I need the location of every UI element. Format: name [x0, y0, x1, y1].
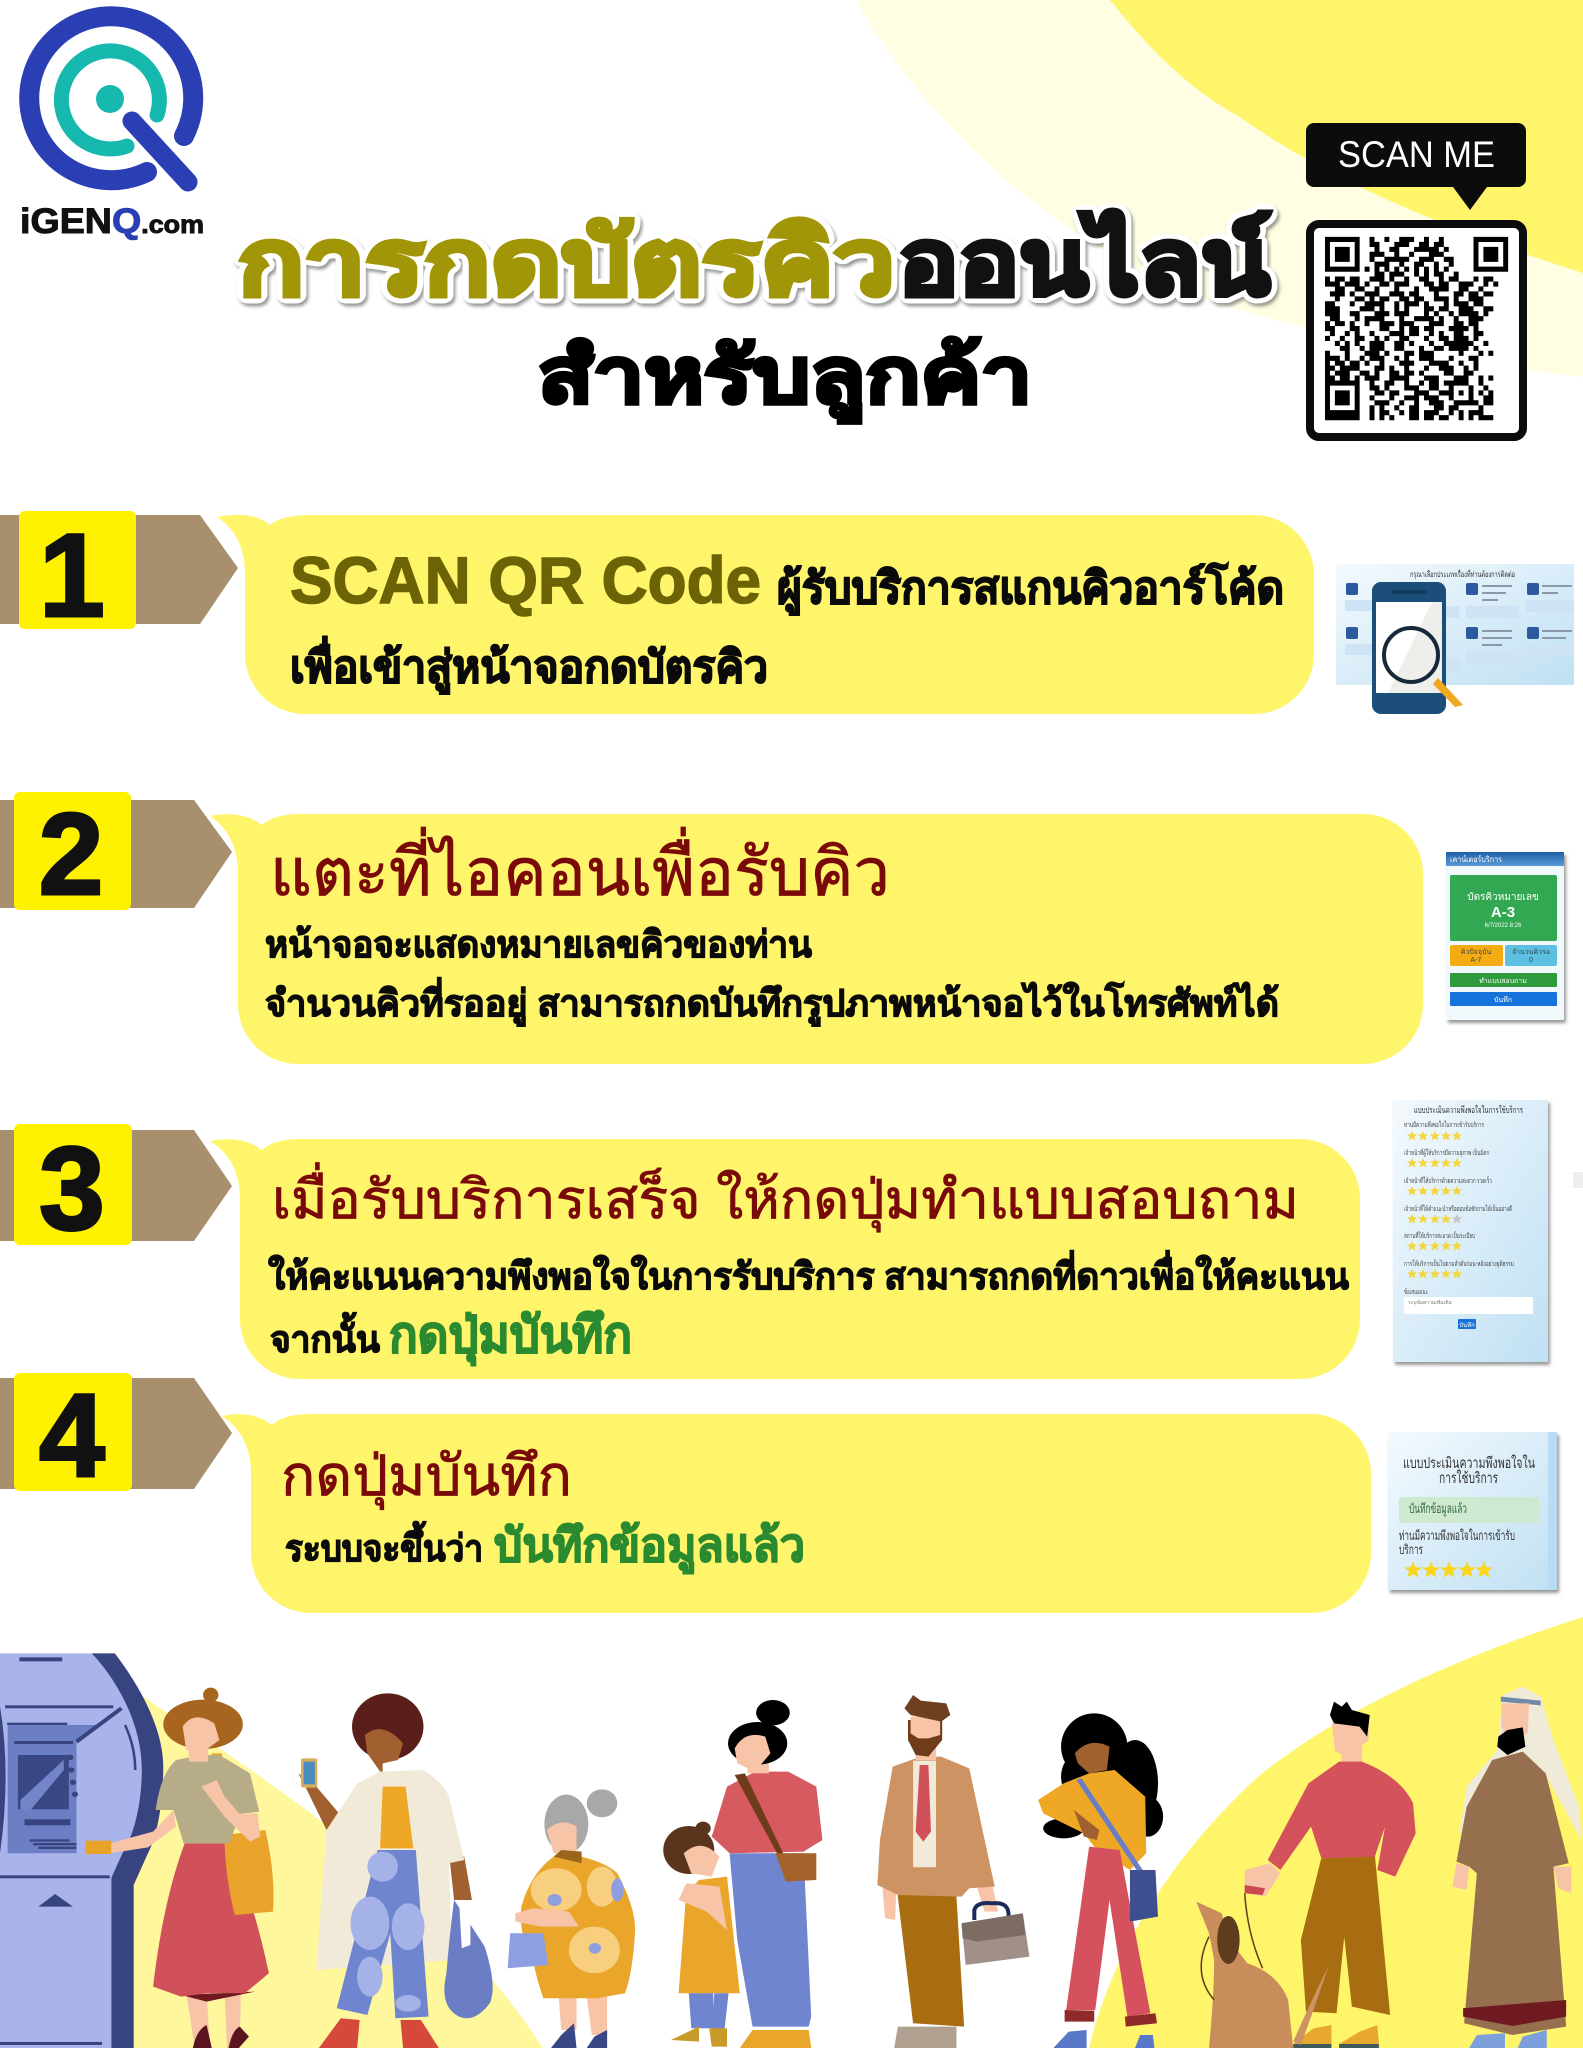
person: man in red sweater walking dog [1245, 1702, 1416, 2048]
step 1 screenshot [1336, 564, 1574, 714]
step 2 screenshot: 6/7/2022 8:26 [1485, 923, 1522, 929]
title line 1 [238, 210, 1270, 314]
person: woman with red skirt at ATM [86, 1688, 273, 2048]
step 2 bubble [210, 814, 1423, 1064]
step 1 number badge: 1 [39, 510, 105, 642]
step 4 screenshot: ท่านมีความพึงพอใจในการเข้ารับ [1399, 1528, 1515, 1543]
title line 1: การกดบัตรคิว [238, 212, 895, 314]
step 2 number badge: 2 [39, 789, 103, 919]
step 4 [0, 1370, 1557, 1613]
step 3 ribbon [0, 1130, 232, 1241]
title line 1: ออนไลน์ [898, 210, 1270, 314]
title line 2: สำหรับลูกค้า [538, 334, 1032, 423]
step 4 text: บันทึกข้อมูลแล้ว [494, 1519, 805, 1574]
phone icon with magnifier [1372, 582, 1463, 714]
step 4 screenshot: บันทึกข้อมูลแล้ว [1409, 1501, 1467, 1517]
five stars [1404, 1562, 1493, 1577]
QR code [1310, 224, 1523, 437]
step 2 screenshot: บัตรคิวหมายเลข [1467, 892, 1539, 903]
step 3 text: เมื่อรับบริการเสร็จ ให้กดปุ่มทำแบบสอบถาม [272, 1162, 1299, 1233]
person: man with beard and briefcase [877, 1695, 1029, 2048]
step 4 number badge [14, 1370, 132, 1502]
step 3 bubble [210, 1139, 1360, 1379]
step 4 text [281, 1444, 805, 1574]
logo wordmark: iGENQ.com [20, 202, 204, 241]
background: pale yellow arc top right [855, 0, 1583, 377]
stray grey tab [1573, 1172, 1583, 1188]
step 4 screenshot: การใช้บริการ [1439, 1469, 1498, 1487]
step 4 bubble [222, 1414, 1371, 1613]
step 2 number badge [14, 789, 131, 919]
step 4 text: ระบบจะขึ้นว่า [285, 1521, 483, 1569]
step 3 screenshot: แบบประเมินความพึงพอใจในการใช้บริการ [1414, 1105, 1523, 1115]
step 1 bubble [217, 515, 1314, 714]
step 1 text: ผู้รับบริการสแกนคิวอาร์โค้ด [777, 561, 1284, 615]
step 4 ribbon [0, 1378, 232, 1489]
rating stars [1407, 1131, 1462, 1278]
step 2 screenshot: 0 [1529, 957, 1533, 964]
step 2 text: หน้าจอจะแสดงหมายเลขคิวของท่าน [265, 924, 812, 965]
dog on leash [1196, 1893, 1329, 2048]
illustration: queue right part [877, 1687, 1582, 2048]
step 3 screenshot: บันทึก [1459, 1322, 1475, 1329]
step 1 text: SCAN QR Code [290, 543, 761, 617]
step 1 number badge [19, 510, 136, 642]
step 3 number badge: 3 [39, 1123, 105, 1255]
person: mother and child [663, 1700, 822, 2048]
step 3 screenshot: เจ้าหน้าที่ให้บริการด้วยความสะดวก รวดเร็ว [1404, 1176, 1492, 1185]
logo mark [29, 16, 193, 182]
step 1 text [290, 543, 1284, 694]
step 3 screenshot: สถานที่ให้บริการสะอาด เป็นระเบียบ [1404, 1231, 1475, 1240]
step 4 screenshot: บริการ [1399, 1542, 1423, 1557]
step 3 screenshot: ระบุข้อความเพิ่มเติม [1408, 1299, 1452, 1306]
step 2 screenshot: บันทึก [1494, 995, 1512, 1004]
background: pale yellow wedge bottom left [120, 1693, 543, 2048]
step 3 screenshot: การให้บริการเป็นไปตามลำดับก่อน-หลังอย่างยุติธรรม [1404, 1259, 1514, 1268]
title line 1: ออนไลน์ [898, 210, 1270, 314]
step 3 screenshot: เจ้าหน้าที่ผู้ให้บริการมีความสุภาพ เป็นมิตร [1404, 1148, 1489, 1157]
step 1 text: เพื่อเข้าสู่หน้าจอกดบัตรคิว [290, 636, 768, 694]
step 2 screenshot: จำนวนคิวรอ [1512, 948, 1550, 956]
step 3 text [268, 1162, 1349, 1366]
step 4 screenshot [1388, 1432, 1557, 1590]
step 3 [0, 1100, 1583, 1379]
step 3 screenshot: ข้อเสนอแนะ [1404, 1288, 1428, 1296]
step 3 number badge [14, 1123, 132, 1255]
person: woman with curly hair [1038, 1713, 1163, 2048]
logo: iGENQ [20, 16, 204, 241]
step 1 ribbon [0, 515, 238, 624]
step 2 screenshot: ทำแบบสอบถาม [1479, 977, 1527, 985]
step 4 number badge: 4 [39, 1370, 105, 1502]
step 2 screenshot: A-3 [1491, 904, 1515, 921]
step 2 ribbon [0, 800, 232, 908]
title [238, 210, 1270, 423]
step 2 screenshot [1446, 852, 1564, 1020]
step 3 text: ให้คะแนนความพึงพอใจในการรับบริการ สามารถกดที่ดาวเพื่อให้คะแนน [268, 1250, 1349, 1297]
background: bright yellow arc top right [1110, 0, 1583, 273]
step 2 [0, 789, 1564, 1064]
scan me badge: SCAN ME [1338, 134, 1495, 175]
step 4 text: กดปุ่มบันทึก [281, 1444, 572, 1510]
step 2 screenshot: A-7 [1471, 957, 1482, 964]
person: grandmother in floral dress [508, 1789, 635, 2048]
step 3 text: จากนั้น [270, 1312, 380, 1360]
scan me badge [1306, 123, 1526, 210]
person: woman in white coat with phone [298, 1693, 493, 2048]
step 3 screenshot: ท่านมีความพึงพอใจในการเข้ารับบริการ [1404, 1120, 1484, 1129]
step 2 text: แตะที่ไอคอนเพื่อรับคิว [270, 827, 890, 909]
ATM machine [0, 1653, 163, 2048]
title line 1: การกดบัตรคิว [238, 212, 895, 314]
background: bright yellow arc bottom right [1089, 1617, 1583, 2048]
illustration: ATM and queue left part [0, 1653, 822, 2048]
step 2 text: จำนวนคิวที่รออยู่ สามารถกดบันทึกรูปภาพหน้าจอไว้ในโทรศัพท์ได้ [265, 977, 1279, 1027]
step 1 [0, 510, 1574, 714]
step 3 screenshot [1393, 1100, 1548, 1362]
step 1 screenshot: กรุณาเลือกประเภทเรื่องที่ท่านต้องการติดต่อ [1410, 568, 1515, 579]
person: man in thobe and headdress [1452, 1687, 1582, 2048]
step 2 text [265, 827, 1279, 1027]
step 2 screenshot: คิวปัจจุบัน [1461, 948, 1491, 956]
step 3 text: กดปุ่มบันทึก [389, 1307, 632, 1366]
step 3 screenshot: เจ้าหน้าที่ให้คำแนะนำหรือตอบข้อซักถามได้เป็นอย่างดี [1404, 1204, 1512, 1213]
step 2 screenshot: เคาน์เตอร์บริการ [1450, 854, 1503, 864]
